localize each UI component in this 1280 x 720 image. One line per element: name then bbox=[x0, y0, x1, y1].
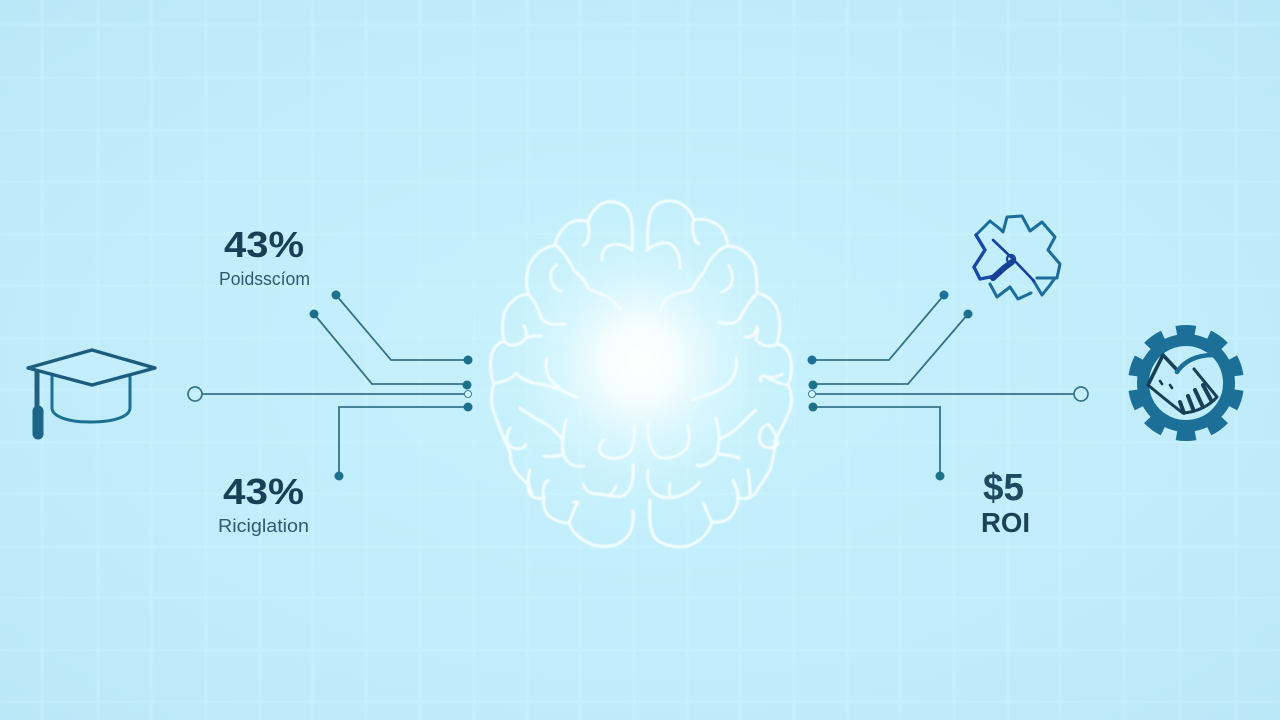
statistic: 43% Poidsscíom: 43% bbox=[224, 224, 304, 265]
label: Poidsscíom: Poidsscíom bbox=[219, 269, 310, 289]
statistic: 43% Poidsscíom bbox=[219, 224, 310, 289]
handshake bbox=[1148, 355, 1217, 413]
brain illustration bbox=[491, 201, 791, 547]
statistic: $5 ROI: $5 bbox=[983, 467, 1024, 509]
connectors: right bbox=[808, 290, 1088, 480]
brain left hemisphere bbox=[491, 202, 635, 546]
central glow bbox=[470, 187, 810, 537]
connectors: left bbox=[188, 290, 472, 480]
label: ROI: ROI bbox=[981, 507, 1030, 538]
icon: graduation cap bbox=[28, 350, 155, 434]
statistic: 43% Riciglation bbox=[218, 471, 309, 536]
statistic: $5 ROI bbox=[981, 467, 1030, 538]
statistic: 43% Riciglation: 43% bbox=[223, 471, 304, 512]
icon: gear with handshake bbox=[1124, 321, 1248, 445]
icon: outlined gear with tools bbox=[974, 216, 1060, 299]
label: Riciglation: Riciglation bbox=[218, 516, 309, 536]
brain right hemisphere bbox=[647, 201, 791, 547]
